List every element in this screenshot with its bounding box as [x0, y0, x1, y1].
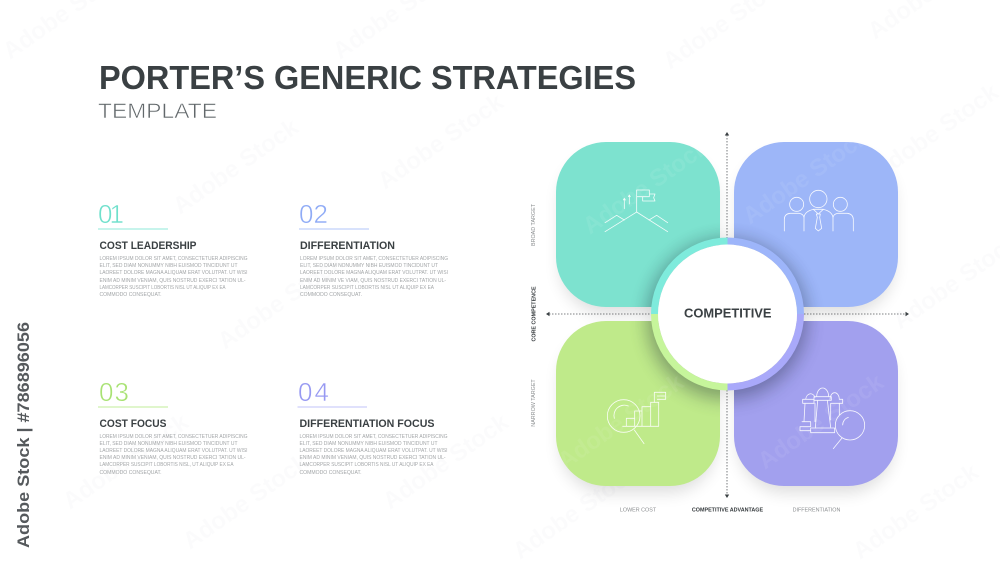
body text 01	[100, 256, 248, 298]
body text 02: LAMCORPER SUSCIPIT LOBORTIS NISL UT ALIQUIP EX EA	[300, 285, 434, 291]
body text 03: ELIT, SED DIAM NONUMMY NIBH EUISMOD TINCIDUNT UT	[100, 441, 238, 447]
body text 02: ENIM AD MINIM VE VIAM, QUIS NOSTRUD EXERCI TATION UL-	[300, 278, 446, 284]
body text 02: LOREM IPSUM DOLOR SIT AMET, CONSECTETUER ADIPISCING	[300, 256, 448, 262]
heading cost leadership: COST LEADERSHIP	[100, 240, 196, 252]
title: PORTER’S GENERIC STRATEGIES	[99, 59, 636, 96]
axis label: core competence: CORE COMPETENCE	[532, 286, 538, 342]
body text 04: ELIT, SED DIAM NONUMMY NIBH EUISMOD TINCIDUNT UT	[300, 441, 438, 447]
card shadows	[560, 154, 894, 493]
centre label: COMPETITIVE	[684, 306, 772, 320]
panel: bottom left card	[556, 321, 720, 486]
text: Adobe Stock	[553, 368, 689, 475]
axis label: broad target: BROAD TARGET	[531, 203, 537, 246]
heading differentiation focus: DIFFERENTIATION FOCUS	[300, 418, 434, 430]
item 03: cost focus	[98, 377, 248, 476]
body text 01: ELIT, SED DIAM NONUMMY NIBH EUISMOD TINCIDUNT UT	[100, 263, 238, 269]
panel: top right card	[734, 142, 898, 307]
body text 04: COMMODO CONSEQUAT.	[300, 470, 362, 476]
body text 03: LOREM IPSUM DOLOR SIT AMET, CONSECTETUER ADIPISCING	[100, 434, 248, 440]
ring segment: top left	[651, 238, 728, 314]
ring segment: bottom left	[651, 314, 728, 390]
body text 02	[300, 256, 448, 298]
number 03: 03	[99, 377, 129, 407]
heading differentiation: DIFFERENTIATION	[300, 240, 395, 252]
text: Adobe Stock	[868, 78, 1000, 185]
axis: horizontal arrow	[546, 312, 909, 316]
text: Adobe Stock	[738, 123, 874, 230]
number 02: 02	[299, 199, 328, 229]
body text 03	[100, 434, 248, 476]
ring segment: top right	[728, 238, 804, 314]
body text 04: LAOREET DOLORE MAGNA ALIQUAM ERAT VOLUTPAT. UT WISI	[300, 448, 448, 454]
body text 04: ENIM AD MINIM VENIAM, QUIS NOSTRUD EXERCI TATION UL-	[300, 455, 446, 461]
text: Adobe Stock	[168, 113, 304, 220]
text: Adobe Stock	[508, 458, 644, 563]
body text 01: ENIM AD MINIM VENIAM, QUIS NOSTRUD EXERCI TATION UL-	[100, 278, 246, 284]
text: Adobe Stock	[58, 408, 194, 515]
item 02: differentiation	[299, 199, 448, 298]
body text 01: LOREM IPSUM DOLOR SIT AMET, CONSECTETUER ADIPISCING	[100, 256, 248, 262]
axis label: competitive advantage: COMPETITIVE ADVANTAGE	[692, 508, 763, 514]
text: Adobe Stock	[753, 368, 889, 475]
axis label: differentiation: DIFFERENTIATION	[793, 508, 841, 514]
heading cost focus: COST FOCUS	[100, 418, 166, 430]
body text 04: LAMCORPER SUSCIPIT LOBORTIS NISL UT ALIQUIP EX EA	[300, 462, 434, 468]
body text 03: LAOREET DOLORE MAGNA ALIQUAM ERAT VOLUTPAT. UT WISI	[100, 448, 248, 454]
panel: bottom right card	[734, 321, 898, 486]
text: Adobe Stock	[178, 448, 314, 555]
text: Adobe Stock	[213, 248, 349, 355]
item 01: cost leadership	[98, 199, 248, 298]
subtitle: TEMPLATE	[98, 100, 217, 123]
text: Adobe Stock	[578, 133, 714, 240]
stock id side text: Adobe Stock | #786896056	[14, 322, 33, 548]
body text 03: COMMODO CONSEQUAT.	[100, 470, 162, 476]
icon: mountain with flag	[605, 190, 668, 232]
icon: team of three people	[784, 190, 853, 231]
panel: top left card	[556, 142, 720, 307]
body text 01: LAOREET DOLORE MAGNA ALIQUAM ERAT VOLUTPAT. UT WISI	[100, 270, 248, 276]
text: Adobe Stock	[848, 458, 984, 563]
axis label: lower cost: LOWER COST	[620, 508, 657, 514]
body text 04	[300, 434, 448, 476]
icon: chess pieces and magnifier	[800, 388, 865, 449]
body text 01: LAMCORPER SUSCIPIT LOBORTIS NISL UT ALIQUIP EX EA	[100, 285, 226, 291]
ring segment: bottom right	[728, 314, 804, 390]
text: Adobe Stock	[378, 408, 514, 515]
body text 02: COMMODO CONSEQUAT.	[300, 292, 362, 298]
icon: magnifier and growth chart	[607, 392, 666, 444]
body text 03: ENIM AD MINIM VENIAM, QUIS NOSTRUD EXERCI TATION UL-	[100, 455, 246, 461]
body text 04: LOREM IPSUM DOLOR SIT AMET, CONSECTETUER ADIPISCING	[300, 434, 448, 440]
body text 01: COMMODO CONSEQUAT.	[100, 292, 162, 298]
number 01: 01	[98, 199, 124, 229]
text: Adobe Stock	[373, 88, 509, 195]
number 04: 04	[298, 377, 329, 407]
body text 02: ELIT, SED DIAM NONUMMY NIBH EUISMOD TINCIDUNT UT	[300, 263, 439, 269]
body text 02: LAOREET DOLORE MAGNA ALIQUAM ERAT VOLUTPAT. UT WISI	[300, 270, 448, 276]
body text 03: LAMCORPER SUSCIPIT LOBORTIS NISL, UT ALIQUIP EX EA	[100, 462, 234, 468]
axis: vertical arrow	[725, 132, 729, 498]
axis label: narrow target: NARROW TARGET	[531, 379, 537, 427]
centre circle	[650, 238, 806, 394]
item 04: differentiation focus	[298, 377, 448, 476]
